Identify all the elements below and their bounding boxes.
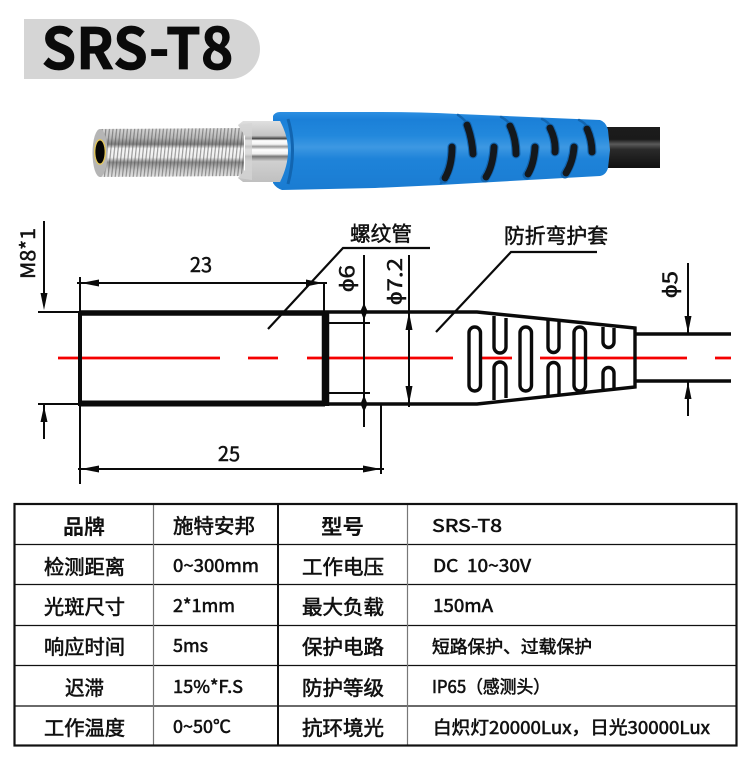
dimension drawing — [12, 217, 731, 484]
dimension phi 5: ϕ5 — [654, 271, 683, 298]
table labels: 检测距离 — [44, 551, 125, 580]
dimension M8*1 — [12, 221, 48, 439]
neck and sleeve outline — [325, 312, 635, 404]
metal collar — [238, 119, 292, 184]
dimension 25: 25 — [218, 438, 240, 467]
table values: SRS-T8 — [432, 512, 502, 538]
centre line (red dashes) — [58, 357, 731, 359]
table labels: 防护等级 — [302, 672, 384, 701]
extension lines — [38, 277, 381, 484]
table labels: 光斑尺寸 — [44, 591, 125, 620]
dimension phi 6 — [331, 255, 368, 427]
table grid — [14, 504, 737, 746]
table labels: 最大负载 — [302, 591, 384, 620]
table values: 2*1mm — [173, 592, 235, 618]
table values — [173, 510, 710, 740]
dimension 23 — [77, 249, 327, 286]
table labels: 品牌 — [63, 510, 105, 540]
table labels: 迟滞 — [65, 672, 104, 701]
title pill — [24, 4, 260, 86]
title text: SRS-T8 — [42, 4, 234, 86]
dimension phi 7.2: ϕ7.2 — [379, 258, 408, 305]
dimension 23: 23 — [190, 249, 212, 278]
threaded tube outline — [80, 311, 326, 406]
product photo: sensor — [92, 112, 660, 190]
table values: 15%*F.S — [173, 673, 243, 699]
table values: 白炽灯20000Lux，日光30000Lux — [433, 714, 710, 740]
table labels — [44, 510, 384, 741]
dimension phi 5 — [654, 263, 692, 416]
table labels: 保护电路 — [302, 631, 384, 660]
table labels: 响应时间 — [44, 631, 125, 660]
dimension M8*1: M8*1 — [12, 228, 41, 279]
specification table — [14, 504, 737, 746]
callout: threaded tube — [268, 217, 430, 329]
callout: threaded tube: 螺纹管 — [350, 217, 412, 247]
cable outline — [635, 334, 731, 381]
table labels: 型号 — [321, 510, 364, 540]
blue anti-bend sleeve — [273, 112, 610, 190]
table values: 0~50℃ — [173, 713, 231, 739]
dimension 25 — [78, 438, 384, 472]
table values: IP65（感测头） — [432, 674, 550, 699]
sleeve slots — [469, 316, 614, 400]
dimension phi 7.2 — [379, 255, 412, 407]
table labels: 工作温度 — [44, 712, 125, 741]
table values: 施特安邦 — [173, 510, 255, 539]
threaded barrel — [92, 128, 244, 177]
callout: anti-bend sleeve: 防折弯护套 — [504, 219, 608, 249]
table values: 短路保护、过载保护 — [432, 634, 592, 659]
callout: anti-bend sleeve — [436, 219, 608, 332]
table values: 5ms — [173, 632, 208, 658]
sleeve slots — [441, 115, 592, 183]
black cable — [600, 127, 660, 168]
table values: 0~300mm — [173, 552, 259, 578]
table values: 150mA — [433, 592, 493, 618]
table labels: 抗环境光 — [302, 712, 384, 741]
table labels: 工作电压 — [302, 551, 384, 580]
dimension phi 6: ϕ6 — [331, 265, 360, 292]
table values: DC 10~30V — [433, 552, 532, 578]
